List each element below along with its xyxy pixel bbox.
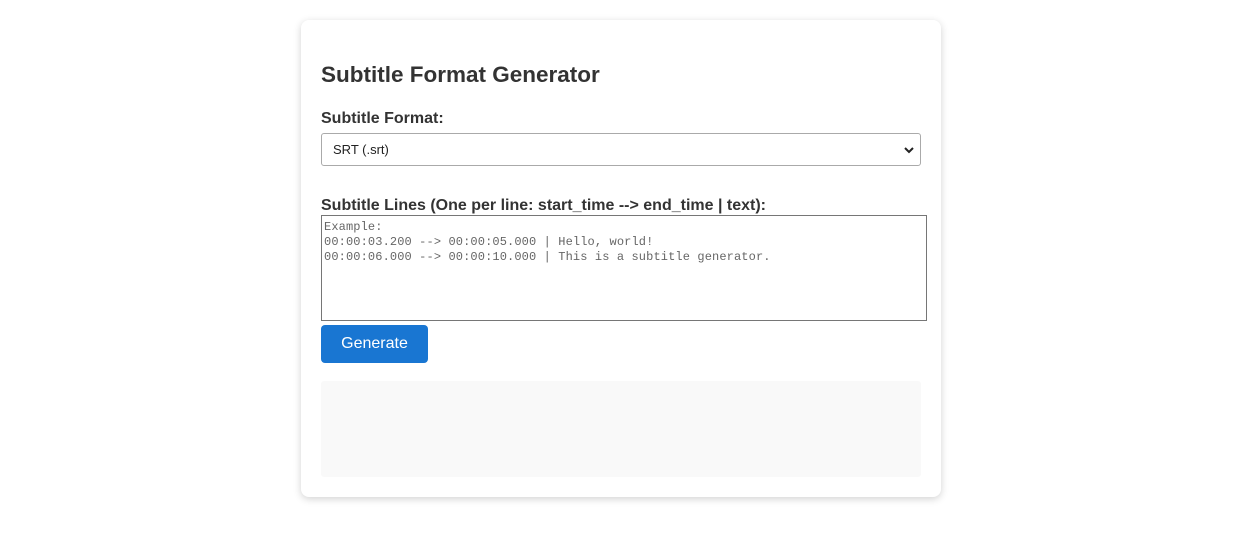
button: generate: [321, 325, 428, 363]
label: subtitle lines: Subtitle Lines (One per line: start_time --> end_time | text):: [321, 197, 766, 214]
button: generate: Generate: [341, 335, 408, 352]
output box: [321, 381, 921, 477]
select: format: SRT (.srt): [333, 142, 389, 157]
title: Subtitle Format Generator: [321, 62, 600, 87]
select: format: [321, 133, 921, 166]
textarea: [321, 215, 927, 321]
card: [301, 20, 941, 497]
label: subtitle format: Subtitle Format:: [321, 110, 444, 127]
textarea: Example: 00:00:03.200 --> 00:00:05.000 | Hello, world! 00:00:06.000 --> 00:00:10.000 | This is a subtitle generator.: [324, 220, 771, 264]
